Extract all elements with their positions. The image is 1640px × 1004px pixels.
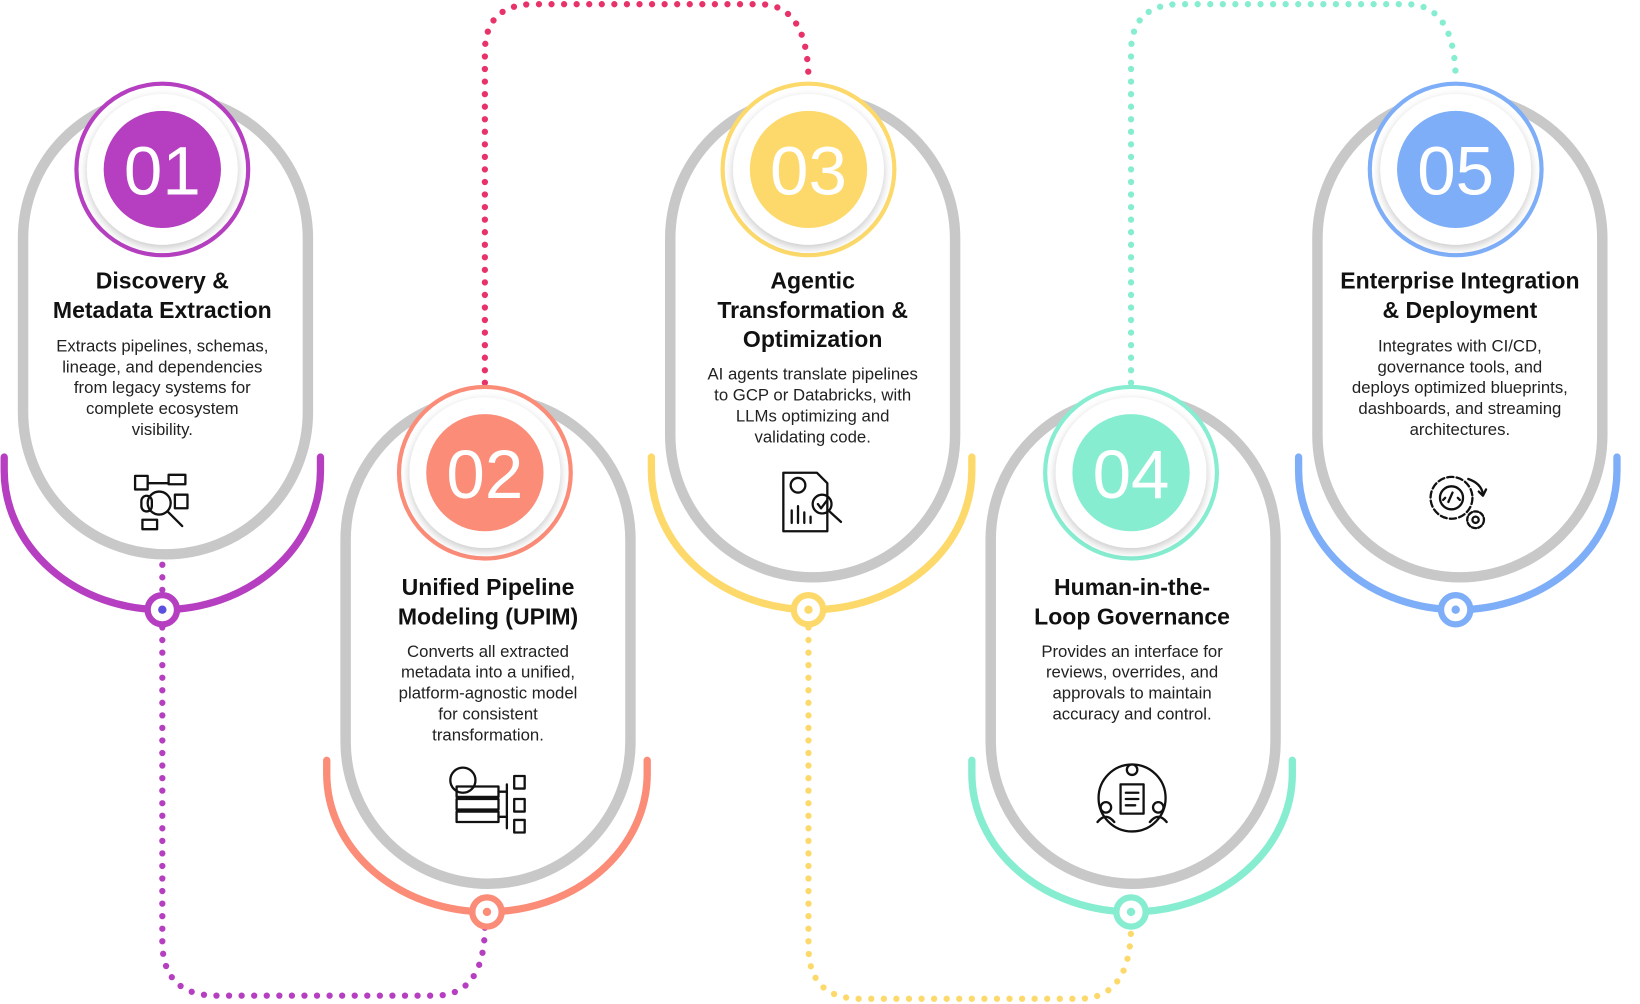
step 02: Unified Pipeline — [402, 574, 575, 600]
step 02: Converts all extracted — [407, 642, 569, 661]
step 01: Discovery & — [96, 268, 229, 294]
connector: teal dotted 04 to 05 — [1131, 4, 1456, 395]
step 01 — [4, 84, 320, 624]
step 04 — [972, 387, 1292, 927]
step 03: to GCP or Databricks, with — [714, 386, 911, 405]
step 03 — [651, 84, 972, 624]
icon: document analytics — [783, 473, 841, 531]
step 03: Transformation & — [717, 297, 908, 323]
step 03: Optimization — [743, 326, 882, 352]
step 03: validating code. — [754, 427, 871, 446]
step 05: governance tools, and — [1377, 357, 1542, 376]
step 05: Enterprise Integration — [1340, 268, 1580, 294]
step 04: approvals to maintain — [1052, 684, 1212, 703]
connector: yellow dotted 03 to 04 — [808, 628, 1131, 999]
step 01: lineage, and dependencies — [62, 357, 262, 376]
step 05: deploys optimized blueprints, — [1352, 378, 1568, 397]
step 02: metadata into a unified, — [401, 663, 575, 682]
step 05: 05 — [1417, 132, 1494, 210]
step 03: Agentic — [770, 268, 855, 294]
step 03: 03 — [770, 132, 847, 210]
step 01: complete ecosystem — [86, 399, 239, 418]
step 05: & Deployment — [1382, 297, 1538, 323]
step 02: Modeling (UPIM) — [398, 603, 578, 629]
step 04: 04 — [1093, 435, 1169, 513]
step 04: reviews, overrides, and — [1046, 663, 1218, 682]
step 05: dashboards, and streaming — [1358, 399, 1561, 418]
icon: gears deployment — [1431, 477, 1486, 528]
step 04: Human-in-the- — [1054, 574, 1210, 600]
step 02 — [327, 387, 647, 927]
step 02: 02 — [446, 435, 523, 513]
step 03: AI agents translate pipelines — [707, 365, 918, 384]
connector: purple dotted 01 to 02 — [162, 565, 485, 996]
step 01: 01 — [124, 132, 201, 210]
step 04: Loop Governance — [1034, 603, 1230, 629]
step 02: platform-agnostic model — [399, 684, 577, 703]
step 01: visibility. — [132, 420, 193, 439]
step 05: architectures. — [1410, 420, 1510, 439]
icon: human governance — [1098, 765, 1167, 831]
connector: pink dotted 02 to 03 — [485, 4, 808, 395]
step 01: Metadata Extraction — [53, 297, 272, 323]
icon: pipeline model — [450, 768, 525, 832]
step 01: from legacy systems for — [74, 378, 251, 397]
step 03: LLMs optimizing and — [736, 406, 889, 425]
step 05 — [1299, 84, 1617, 624]
step 04: Provides an interface for — [1041, 642, 1223, 661]
step 02: for consistent — [438, 705, 538, 724]
icon: metadata search — [135, 475, 187, 529]
step 04: accuracy and control. — [1052, 705, 1212, 724]
step 05: Integrates with CI/CD, — [1378, 336, 1542, 355]
step 02: transformation. — [432, 725, 544, 744]
step 01: Extracts pipelines, schemas, — [56, 336, 268, 355]
